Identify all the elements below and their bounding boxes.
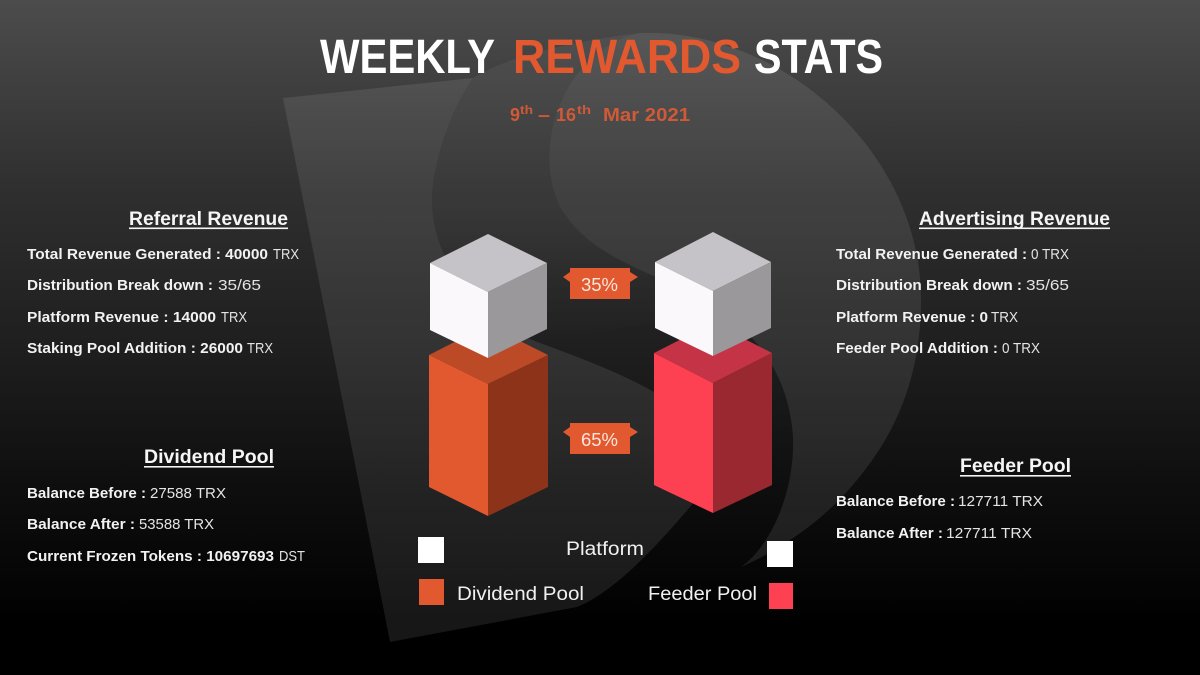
panel: dividend pool [27, 446, 305, 565]
row: balance after [836, 525, 1032, 542]
title [320, 31, 883, 84]
heading: referral revenue: Referral Revenue [129, 208, 288, 230]
row: balance before: Balance Before : [27, 485, 146, 502]
row: balance before: 127711 TRX [958, 493, 1043, 510]
row: staking pool addition: TRX [247, 340, 273, 357]
callout: 35%: 35% [581, 275, 618, 295]
row: total revenue generated: Total Revenue Generated : [836, 246, 1027, 263]
heading: advertising revenue: Advertising Revenue [919, 208, 1110, 230]
row: platform revenue: TRX [991, 309, 1018, 326]
row: total revenue generated: TRX [273, 246, 299, 263]
date range: th [577, 103, 591, 117]
heading: dividend pool: Dividend Pool [144, 446, 274, 468]
chart: feeder pool column [654, 232, 772, 513]
row: distribution break down: Distribution Break down : [836, 277, 1022, 294]
date range: 9 [510, 105, 520, 125]
row: balance after: Balance After : [836, 525, 943, 542]
bar: dividend pool 65% [429, 325, 548, 516]
row: balance after: 127711 TRX [946, 525, 1032, 542]
title: REWARDS [513, 31, 741, 84]
row: balance before: 27588 TRX [150, 485, 226, 502]
legend swatch: platform left [418, 537, 444, 563]
watermark logo [283, 33, 921, 642]
bar: feeder pool 65% [654, 323, 772, 513]
callout: 65% [563, 423, 638, 454]
callout: 35% [563, 268, 638, 299]
legend swatch: feeder pool [769, 583, 793, 609]
row: current frozen tokens: Current Frozen Tokens : 10697693 [27, 548, 274, 565]
row: feeder pool addition: 0 TRX [1002, 340, 1040, 357]
title: WEEKLY [320, 31, 495, 84]
row: feeder pool addition: Feeder Pool Addition : [836, 340, 998, 357]
row: distribution break down: 35/65 [218, 277, 261, 294]
row: current frozen tokens: DST [279, 548, 305, 565]
cube: platform 35% [430, 234, 547, 358]
row: balance after: Balance After : [27, 516, 135, 533]
row: balance before [836, 493, 1043, 510]
row: platform revenue: Platform Revenue : 0 [836, 309, 988, 326]
row: balance before [27, 485, 226, 502]
row: balance after [27, 516, 214, 533]
row: distribution break down: Distribution Break down : [27, 277, 213, 294]
row: balance after: 53588 TRX [139, 516, 214, 533]
legend label: platform: Platform [566, 539, 644, 560]
legend swatch: platform right [767, 541, 793, 567]
legend [418, 537, 793, 609]
row: balance before: Balance Before : [836, 493, 955, 510]
date range [510, 103, 690, 125]
cube: platform 35% [655, 232, 771, 356]
row: platform revenue: Platform Revenue : 14000 [27, 309, 216, 326]
date range: – [538, 105, 550, 125]
panel: feeder pool [836, 455, 1071, 542]
row: total revenue generated: Total Revenue Generated : 40000 [27, 246, 268, 263]
chart: dividend pool column [429, 234, 548, 516]
date range: 16 [556, 105, 576, 125]
date range: th [520, 103, 533, 117]
title: STATS [754, 31, 883, 84]
callout: 65%: 65% [581, 430, 618, 450]
row: platform revenue: TRX [221, 309, 247, 326]
row: staking pool addition: Staking Pool Addition : 26000 [27, 340, 243, 357]
row: distribution break down: 35/65 [1026, 277, 1069, 294]
panel: referral revenue [27, 208, 299, 357]
legend label: dividend pool: Dividend Pool [457, 584, 584, 605]
panel: advertising revenue [836, 208, 1110, 357]
legend swatch: dividend pool [419, 579, 444, 605]
date range: Mar 2021 [603, 105, 690, 125]
row: total revenue generated: 0 TRX [1031, 246, 1069, 263]
heading: feeder pool: Feeder Pool [960, 455, 1071, 477]
legend label: feeder pool: Feeder Pool [648, 584, 757, 605]
